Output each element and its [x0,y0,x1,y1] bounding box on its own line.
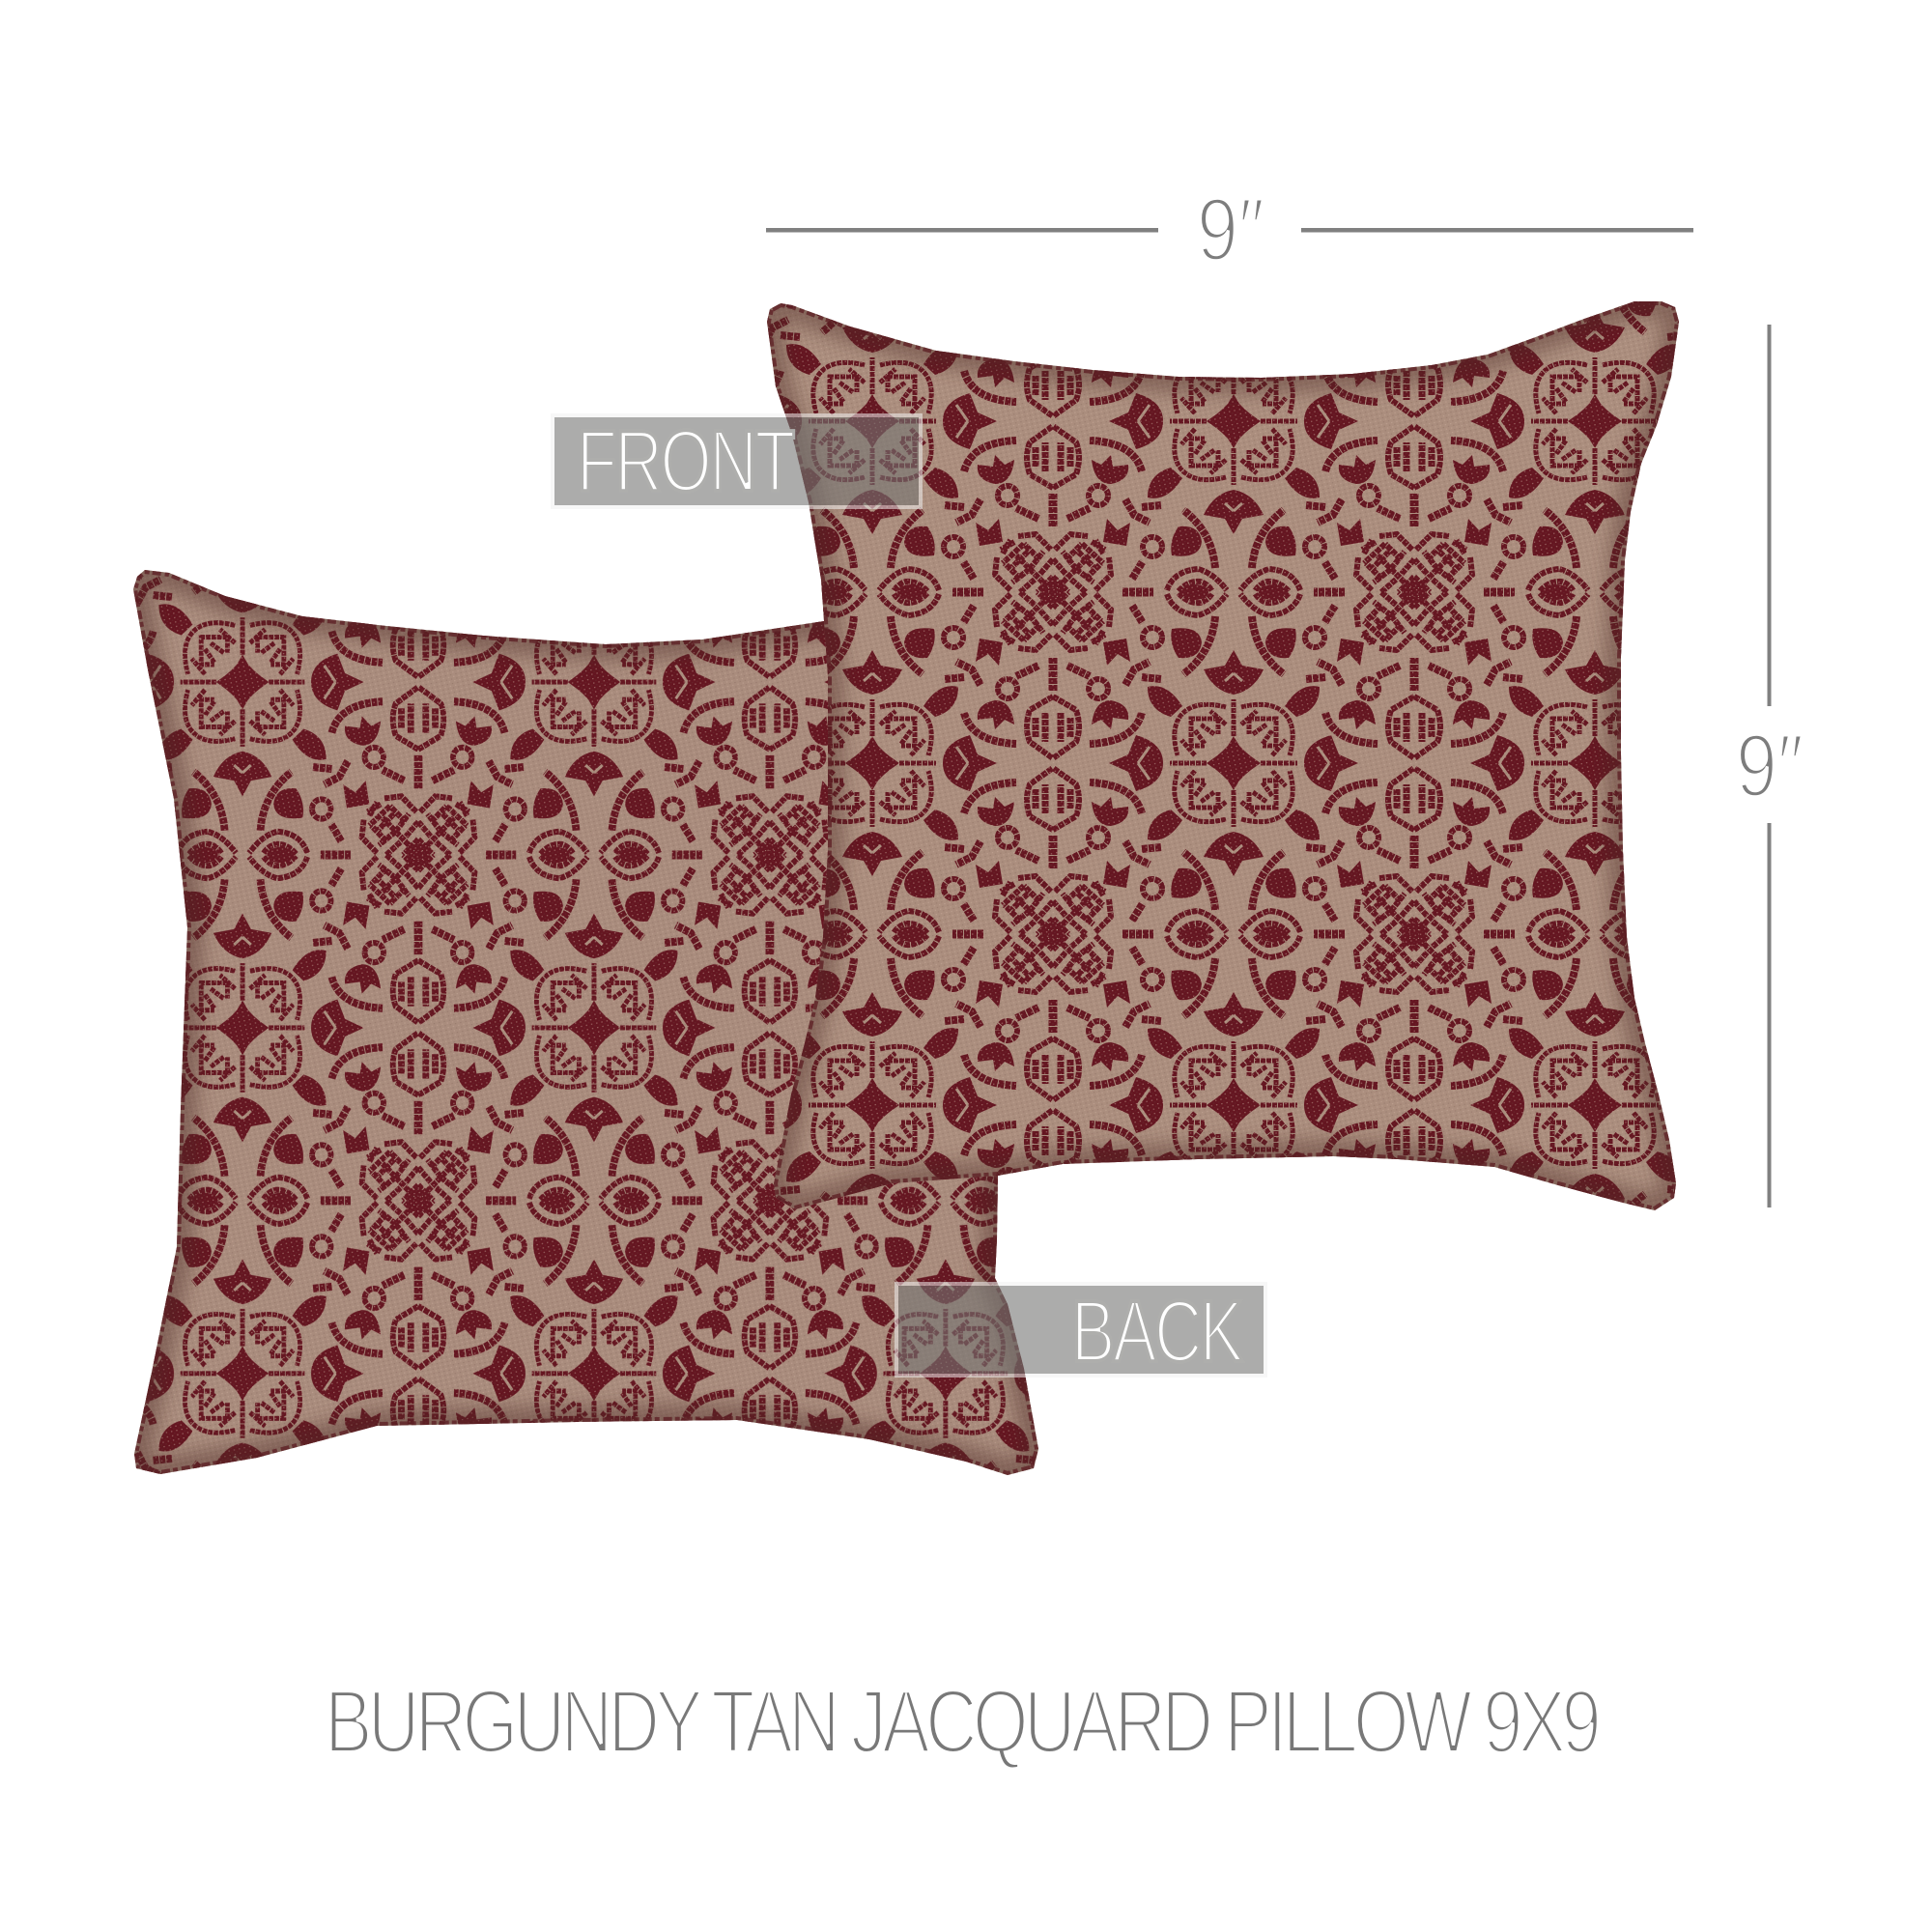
height value: 9″ [1736,717,1804,815]
front pillow [767,301,1679,1210]
front pillow edge shading and piping [767,301,1679,1210]
back pillow [133,570,1038,1475]
front pillow fabric base [767,301,1679,1210]
back pillow fabric base [133,570,1038,1475]
width line right [1301,228,1693,232]
back pillow edge shading and piping [133,570,1038,1475]
front label border [553,415,921,507]
front label box [554,417,919,505]
front pillow knit texture [767,301,1679,1210]
height dimension [1736,325,1804,1208]
back pillow jacquard pattern [133,570,1038,1475]
height line top [1768,325,1772,706]
back label border [896,1284,1265,1376]
back label [896,1284,1265,1380]
back pillow knit texture [133,570,1038,1475]
width line left [766,228,1158,232]
width dimension [766,181,1693,279]
front label [553,413,921,510]
front pillow jacquard pattern [767,301,1679,1210]
front label text: FRONT [577,413,794,510]
back label box [898,1286,1264,1374]
title: BURGUNDY TAN JACQUARD PILLOW 9X9 [325,1671,1599,1772]
width value: 9″ [1197,181,1264,279]
back label text: BACK [1071,1284,1243,1380]
height line bottom [1768,823,1772,1208]
